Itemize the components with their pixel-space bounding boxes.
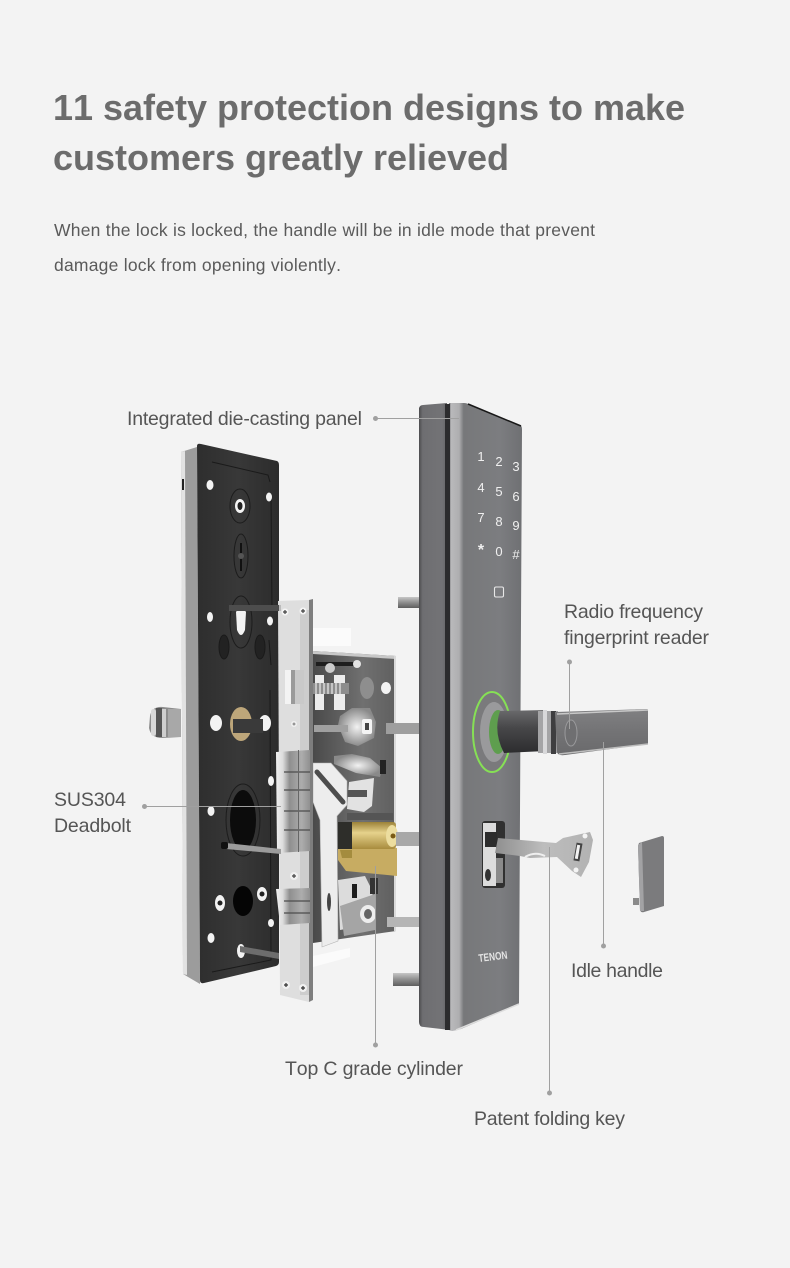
exploded lock illustration [149,403,664,1031]
callout: radio frequency fingerprint reader [564,601,710,729]
callout: SUS304 deadbolt: Deadbolt [54,815,132,837]
front panel [419,403,522,1031]
callout: top C grade cylinder [285,866,464,1080]
cylinder [338,822,398,876]
callout: patent folding key: Patent folding key [474,1108,625,1130]
deadbolts [276,750,310,925]
connecting rods [221,597,420,986]
mortise lock case [313,651,398,947]
keypad: 5 [495,484,503,499]
face plate [278,599,313,1002]
mechanism parts [313,660,398,936]
keypad: 0 [495,544,503,559]
keypad: 1 [477,449,485,464]
keypad: 7 [477,510,485,525]
callout: radio frequency fingerprint reader: Radio frequency [564,601,703,623]
callout: SUS304 deadbolt: SUS304 [54,789,126,811]
title: customers greatly relieved [53,137,509,178]
description text: damage lock from opening violently. [54,255,341,275]
key slot [482,821,505,888]
description text: When the lock is locked, the handle will be in idle mode that prevent [54,220,595,240]
locking lever [313,763,347,947]
keypad: 6 [512,489,520,504]
callout: idle handle [571,742,663,982]
callout: radio frequency fingerprint reader: fingerprint reader [564,627,710,649]
keypad: * [478,542,485,559]
handle end cover [633,836,664,912]
keypad: 2 [495,454,503,469]
keypad: 9 [512,518,520,533]
callout: top C grade cylinder: Top C grade cylinder [285,1058,464,1080]
callout: patent folding key [474,847,625,1130]
back plate knob [149,707,181,738]
keypad: # [512,547,520,562]
keypad: 8 [495,514,503,529]
callout: SUS304 deadbolt [54,789,281,837]
folding key [495,832,593,877]
description text [54,220,595,275]
keypad: 4 [477,480,485,495]
title [53,87,685,178]
callout: idle handle: Idle handle [571,960,663,982]
white spacer pads [313,628,351,967]
back plate [181,444,279,984]
callout: integrated die-casting panel: Integrated die-casting panel [127,408,362,430]
title: 11 safety protection designs to make [53,87,685,128]
keypad: 3 [512,459,520,474]
icon: card reader [494,587,504,597]
handle [473,692,648,772]
keypad [477,449,520,562]
brand logo: TENON [478,950,508,965]
